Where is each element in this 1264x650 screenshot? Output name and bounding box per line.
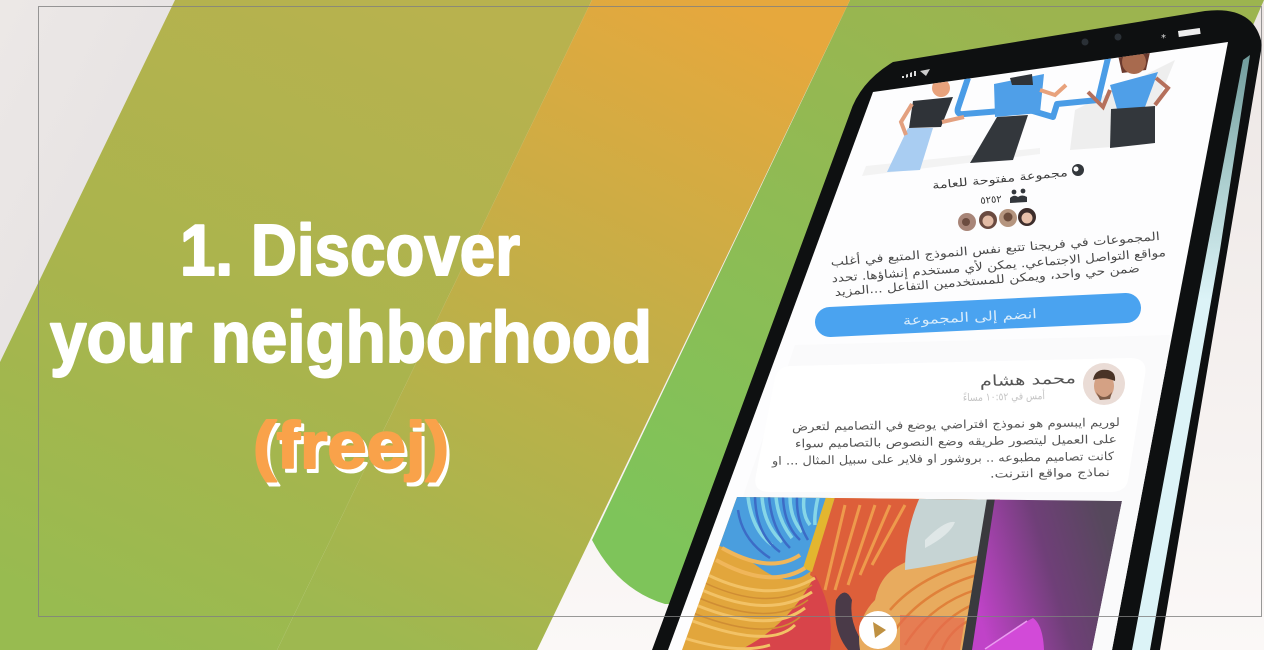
post image	[660, 490, 1122, 650]
phone side edge	[1132, 55, 1250, 650]
member count with people icon: ٥٢٥٢	[980, 194, 1002, 207]
band: olive green	[0, 0, 592, 650]
status bar icons	[902, 28, 1201, 78]
heading: your neighborhood: your neighborhood	[50, 298, 652, 378]
group description paragraph: مواقع التواصل الاجتماعي. يمكن لأي مستخدم إنشاؤها. تحدد	[831, 245, 1166, 286]
group type label with globe icon	[934, 164, 1084, 188]
subheading: (freej): (freej)	[256, 412, 452, 486]
phone	[652, 10, 1262, 650]
post card	[772, 359, 1168, 650]
post body text: كانت تصاميم مطبوعه .. بروشور او فلاير على سبيل المثال ... او	[771, 449, 1115, 469]
member count with people icon	[981, 188, 1027, 204]
status bar icons: *	[1161, 33, 1166, 44]
post time: أمس في ١٠:٥٢ مساءً	[963, 388, 1045, 404]
group description paragraph: المجموعات في فريجنا تتبع نفس النموذج المتبع في أغلب	[830, 228, 1160, 270]
band: right green with curved edge	[592, 0, 1264, 606]
play button	[859, 611, 897, 649]
subheading: (freej): (freej)	[253, 408, 449, 482]
phone screen	[668, 42, 1228, 650]
illustration: three people with speech bubbles	[862, 50, 1175, 176]
join group button	[830, 307, 1126, 329]
author avatar	[1083, 363, 1125, 405]
member avatars	[958, 208, 1036, 231]
group type label with globe icon: مجموعة مفتوحة للعامة	[932, 166, 1068, 192]
group description paragraph	[830, 228, 1166, 300]
author name: محمد هشام	[980, 369, 1076, 390]
heading: 1. Discover: 1. Discover	[180, 211, 520, 291]
post body text: على العميل ليتصور طريقه وضع النصوص بالتصاميم سواء	[795, 432, 1117, 451]
join group button: انضم إلى المجموعة	[903, 307, 1037, 329]
post body text: لوريم ايبسوم هو نموذج افتراضي يوضع في التصاميم لتعرض	[792, 415, 1120, 435]
phone body	[652, 10, 1262, 650]
band: orange gradient	[277, 0, 850, 650]
post body text	[771, 415, 1120, 482]
group description paragraph: ضمن حي واحد، ويمكن للمستخدمين التفاعل ...المزيد	[834, 261, 1140, 300]
post body text: نماذج مواقع انترنت.	[990, 465, 1110, 482]
